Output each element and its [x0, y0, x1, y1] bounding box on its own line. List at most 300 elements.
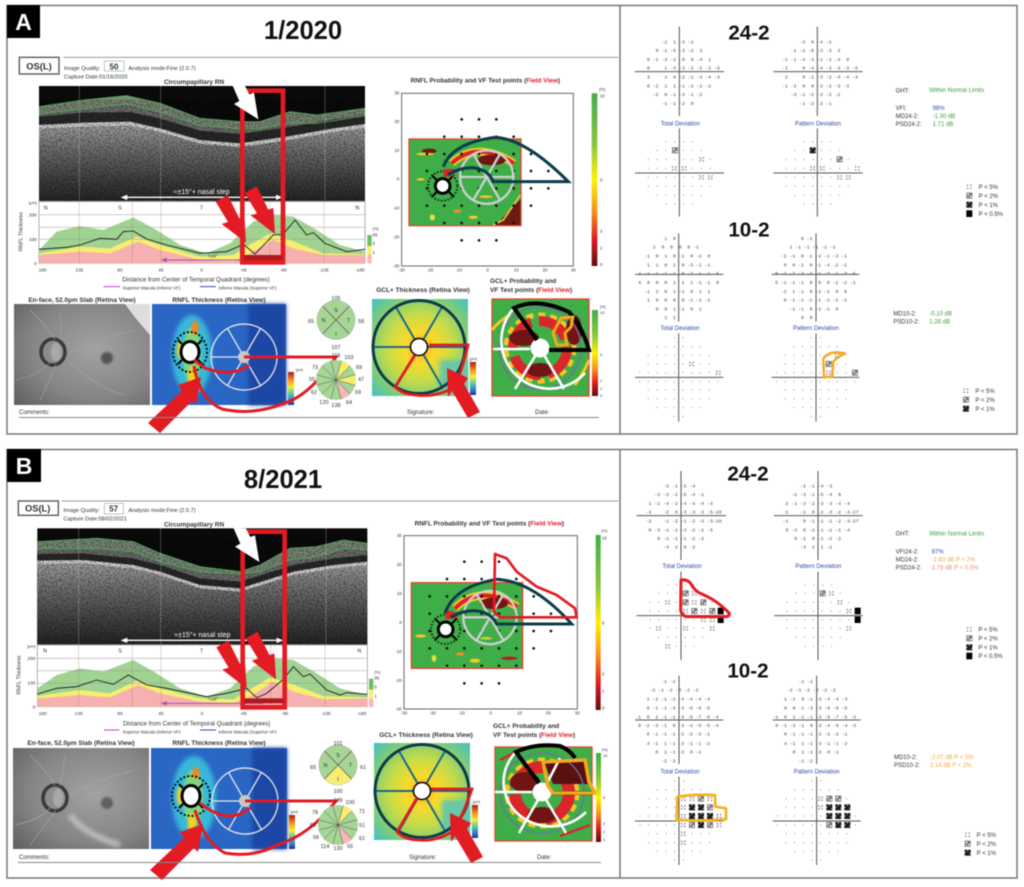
deviation captions	[662, 564, 841, 570]
RNFL thickness profile chart	[17, 643, 380, 734]
global indices: Within Normal Limits	[929, 88, 984, 94]
probability colour scale: 0	[602, 705, 605, 710]
orange defect outline	[543, 760, 595, 793]
plot axes: 0	[399, 620, 402, 625]
scan metadata: Analysis mode:Fine (2.0.7)	[128, 508, 196, 514]
clock sector thickness pie: 78	[312, 810, 318, 816]
OS eye tag	[18, 501, 58, 515]
A 24-2 visual field	[635, 21, 1004, 218]
total deviation values: 6 0 0 0 1 1 1 -1 -1 0	[633, 280, 719, 286]
RNFL thickness profile chart: 180	[39, 268, 47, 273]
global indices: PSD24-2:	[896, 122, 922, 128]
RNFL thickness profile chart: T	[200, 205, 204, 211]
global indices: MD10-2:	[893, 311, 917, 317]
probability legend: P < 2%	[979, 194, 999, 200]
map title: RNFL Probability and VF Test points (Field View)	[415, 521, 564, 528]
quadrant thickness oval: I	[337, 777, 339, 783]
pattern deviation values: -2 -3 -1 -5 -4 0	[780, 492, 841, 498]
plot axes: -30	[399, 267, 405, 272]
total deviation values	[643, 483, 722, 551]
quadrant thickness oval: 107	[331, 345, 341, 351]
global indices: MD10-2:	[894, 755, 917, 761]
wheel centre	[238, 351, 250, 363]
probability colour scale: 5	[600, 352, 603, 357]
total deviation values: 0 -1 -1 -3 -3 -6 -6 -5	[632, 705, 710, 711]
test point dots	[430, 562, 568, 683]
clock sector thickness pie: 73	[312, 365, 318, 371]
clock sector thickness pie: 55	[309, 377, 315, 383]
probability legend: P < 5%	[977, 833, 997, 839]
probability colour scale: 2	[603, 821, 606, 826]
scan metadata	[64, 61, 196, 81]
label A: A	[15, 9, 32, 35]
B 24-2 visual field	[637, 463, 1003, 660]
plot axes: 0	[486, 267, 489, 272]
RNFL thickness profile chart: N	[43, 649, 47, 655]
quadrant thickness oval: 65	[308, 319, 314, 325]
navy sector outline	[443, 137, 568, 182]
orange defect outline	[677, 795, 726, 821]
RNFL thickness profile chart: 1	[374, 694, 377, 699]
global indices: -2.63 dB P < 2%	[932, 558, 976, 564]
global indices: -2.07 dB P < 5%	[930, 755, 974, 761]
plot axes: -20	[427, 267, 434, 272]
RNFL thickness profile chart: Distance from Center of Temporal Quadrant (degrees)	[123, 720, 270, 727]
red arrow to disc	[150, 824, 203, 880]
report footer fields: Signature:	[409, 855, 437, 861]
GCL+ probability map: GCL+ Probability and	[490, 278, 556, 285]
B 10-2 visual field	[632, 659, 997, 865]
test point dots	[427, 119, 566, 240]
deviation captions: Total Deviation	[660, 770, 700, 776]
RNFL thickness profile chart: 200	[28, 656, 36, 661]
pattern deviation values: 0 -1 0 -1 -2 -2	[780, 536, 841, 542]
RNFL thickness profile chart: 100	[29, 237, 37, 242]
date title 1/2020: 1/2020	[264, 17, 342, 45]
RNFL thickness profile chart: 5	[373, 241, 376, 246]
clock sector thickness pie	[310, 798, 365, 852]
probability colour scale	[592, 87, 605, 267]
quadrant thickness oval: 101	[333, 741, 343, 747]
RNFL thickness profile chart	[18, 200, 378, 290]
total deviation values: 1 -2 -4 -2 -4 -4 -4 -4	[643, 501, 713, 507]
optic disc marker	[428, 169, 457, 201]
scan metadata	[63, 503, 196, 522]
deviation axes	[635, 676, 861, 865]
total deviation values: -2 1 -3 -1	[641, 39, 694, 45]
white sector wheel	[212, 768, 278, 834]
probability colour scale: 0	[600, 393, 603, 398]
pattern deviation values: 0 -1 -1 -1 -2 -2 -2 -1	[770, 732, 848, 738]
probability colour scale: 1	[600, 246, 603, 251]
clock sector thickness pie: 138	[331, 403, 341, 409]
quadrant thickness oval: S	[336, 753, 340, 759]
deviation axes	[635, 27, 863, 217]
RNFL thickness profile chart: 95	[374, 675, 380, 680]
probability legend	[963, 389, 995, 413]
plot axes	[393, 91, 576, 272]
plot axes: -10	[395, 649, 402, 654]
probability legend: P < 2%	[978, 636, 998, 642]
colour scale	[289, 810, 298, 849]
deviation captions: Total Deviation	[662, 564, 702, 570]
RNFL thickness profile chart: -90	[280, 268, 287, 273]
global indices	[896, 88, 984, 128]
pattern deviation values	[770, 679, 856, 764]
clock sector thickness pie: 61	[359, 836, 365, 842]
probability colour scale: 2	[600, 228, 603, 233]
colour scale: [µm]	[291, 810, 298, 814]
global indices: 1.71 dB	[933, 122, 953, 128]
nasal step span arrow: ≈±15°+ nasal step	[174, 188, 230, 196]
RNFL thickness profile chart: N	[357, 649, 361, 655]
report footer fields: Date:	[535, 410, 550, 416]
RNFL thickness profile chart: 0	[34, 261, 37, 266]
pattern deviation values: -3 -1 -2 -3 -2 -2	[779, 92, 841, 98]
probability dots	[640, 338, 855, 416]
total deviation values: 0 -2 1 1 -1 -2 -2 -2	[641, 83, 711, 89]
A 10-2 visual field	[633, 218, 995, 422]
nasal step span arrow	[121, 188, 283, 200]
clock sector thickness pie: 71	[359, 809, 365, 815]
total deviation values: 0 -1 -1 -1 -2 -2 -2 -1	[632, 732, 710, 738]
red arrows on RNFL profile	[216, 186, 275, 243]
plot axes: 20	[395, 119, 400, 124]
plot axes: 0	[489, 710, 492, 715]
probability colour scale: 5	[602, 620, 605, 625]
disc marker	[172, 776, 210, 816]
clock sector thickness pie: 130	[333, 846, 343, 852]
probability legend	[965, 833, 997, 857]
total deviation values: -1 -2	[632, 679, 676, 685]
clock sector thickness pie: 64	[346, 400, 352, 406]
pattern deviation values: -3 0 -4 -2	[779, 39, 832, 45]
RNFL thickness profile chart: 95	[373, 232, 378, 237]
pattern deviation values: 5 -1 -1 -1 0 0 0 -2 -2 -1	[769, 280, 856, 286]
GCL+ thickness map	[372, 287, 477, 396]
RNFL thickness profile chart: 5	[374, 685, 377, 690]
pattern deviation values: 0 1 -1 -3 0 -1	[770, 749, 839, 755]
red defect outline	[681, 580, 729, 617]
RNFL probability and VF test points map	[393, 78, 605, 272]
RNFL thickness profile chart: 45	[158, 711, 164, 716]
red highlight rectangle	[243, 532, 285, 707]
GCL+ probability map: VF Test points (Field View)	[490, 287, 572, 294]
RNFL thickness profile chart: [%]	[373, 226, 378, 231]
plot axes: -10	[459, 710, 465, 715]
RNFL thickness profile chart: N	[355, 205, 359, 211]
probability colour scale: 2	[602, 671, 605, 676]
clock sector thickness pie: 47	[358, 377, 364, 383]
total deviation values	[632, 679, 719, 764]
report footer fields: Date:	[537, 855, 552, 861]
probability symbols	[672, 147, 859, 179]
en-face slab image: En-face, 52.0µm Slab (Retina View)	[28, 297, 136, 304]
deviation captions: Pattern Deviation	[794, 770, 840, 776]
plot axes: 30	[397, 533, 402, 538]
RNFL thickness profile chart: 1	[373, 250, 376, 255]
disc marker	[173, 332, 207, 372]
scan metadata: Image Quality:	[63, 508, 100, 514]
pattern deviation values	[780, 483, 859, 551]
total deviation values: 0 1 -1 -3 0 -2	[632, 749, 702, 755]
RNFL thickness profile chart: 135	[75, 711, 83, 716]
nasal step span arrow: ≈±15°+ nasal step	[174, 631, 230, 639]
quadrant thickness oval	[308, 296, 364, 351]
clock sector thickness pie: 62	[311, 390, 317, 396]
GCL+ thickness map: GCL+ Thickness (Retina View)	[376, 287, 470, 294]
probability colour scale: 5	[600, 177, 603, 182]
pattern deviation values: -1 -2	[770, 758, 813, 764]
red defect outline	[494, 554, 577, 617]
red GCL outline	[397, 789, 472, 840]
pattern deviation values: -1 -1 0 -2 -3 -2 -4-27	[780, 509, 859, 515]
RNFL thickness profile chart: ≈±8°	[208, 253, 218, 259]
probability colour scale	[596, 528, 607, 710]
plot axes: 30	[575, 710, 580, 715]
probability colour scale: 5	[603, 795, 606, 800]
report footer fields	[18, 855, 601, 862]
RNFL thickness profile chart: S	[118, 205, 122, 211]
optic disc marker	[431, 609, 460, 644]
pattern deviation values: -2 -1 -2 -3 -2 -2	[770, 688, 836, 694]
centre hole	[532, 782, 552, 802]
en-face slab image	[14, 297, 150, 405]
nasal step span arrow	[121, 631, 283, 643]
report header and circumpapillary scan	[17, 501, 618, 734]
RNFL thickness profile chart: -180	[355, 268, 365, 273]
date title 8/2021: 8/2021	[244, 466, 322, 494]
clock sector thickness pie: 56	[310, 823, 316, 829]
deviation captions: Pattern Deviation	[793, 326, 839, 332]
deviation captions: Pattern Deviation	[795, 564, 841, 570]
pattern deviation values: 2 -1 -3 -2 -3 -3 -4 -4	[780, 501, 850, 507]
clock sector thickness pie: 69	[356, 365, 362, 371]
probability heat map	[409, 139, 521, 226]
probability colour scale: 0	[603, 837, 606, 842]
pattern deviation values: -1 0 -1 -1 -1 -2 -3-27	[780, 518, 859, 524]
RNFL thickness map	[151, 740, 298, 849]
RNFL thickness profile chart: Inferior Macula (Superior VF)	[219, 729, 277, 734]
red arrow on GCL map	[447, 368, 480, 418]
gray sector wheel	[463, 591, 517, 644]
probability legend: P < 5%	[978, 628, 998, 634]
pattern deviation values: 2 0 -1 -3 -2 -4 -4 -3	[779, 75, 858, 81]
pattern deviation values: 1 -1 -1 -1 -1 -2	[769, 245, 836, 251]
plot axes: -30	[395, 707, 402, 712]
red arrows on RNFL profile	[216, 632, 276, 688]
pattern deviation values	[769, 236, 856, 321]
GCL+ thickness map: GCL+ Thickness (Retina View)	[379, 732, 473, 739]
deviation captions: Pattern Deviation	[795, 121, 841, 127]
RNFL thickness profile chart: 200	[29, 213, 37, 218]
probability colour scale: 1	[602, 688, 605, 693]
pattern deviation values: 0 -3 0 -1 -1 -1 -1 -4	[780, 527, 850, 533]
scan title: Circumpapillary RN	[164, 521, 224, 528]
RNFL thickness profile chart: S	[118, 649, 122, 655]
scan metadata: Capture Date:01/16/2020	[64, 75, 128, 81]
pattern deviation values: -1 -2 0 0 -2 -2 -3 -3	[779, 83, 849, 89]
pattern deviation values: 0 -1 -1 -1 -1 -2 -2 -2	[769, 298, 847, 304]
RNFL thickness profile chart: [µm]	[29, 200, 37, 205]
global indices: 2.14 dB P < 2%	[930, 763, 972, 769]
RNFL thickness profile chart: N	[44, 205, 48, 211]
quadrant thickness oval	[310, 741, 366, 795]
centre hole	[530, 338, 550, 358]
centre hole	[414, 782, 430, 800]
deviation captions: Total Deviation	[661, 121, 700, 127]
RNFL thickness profile chart: 0	[201, 711, 204, 716]
RNFL thickness profile chart: RNFL Thickness	[17, 655, 23, 695]
total deviation values: 1 -1 -1 -1 -1 0 -2 -1 -2 -5	[633, 271, 719, 277]
RNFL thickness profile chart: 100	[28, 680, 36, 685]
RNFL thickness profile chart: -135	[321, 711, 331, 716]
total deviation values: 0 -1 -3 -2 0 0 -4 1	[641, 57, 711, 63]
probability colour scale: [%]	[600, 305, 606, 309]
RNFL thickness map: RNFL Thickness (Retina View)	[172, 297, 266, 304]
clock sector thickness pie: 116	[332, 353, 340, 359]
total deviation values: -4 2 0 -2	[643, 545, 695, 551]
probability colour scale: 10	[600, 94, 605, 99]
global indices: MD24-2:	[896, 558, 919, 564]
white arrow	[233, 528, 259, 562]
plot axes: 10	[514, 267, 519, 272]
RNFL thickness profile chart: -45	[240, 711, 247, 716]
RNFL thickness profile chart: Superior Macula (Inferior VF)	[123, 285, 181, 290]
white arrow	[232, 85, 258, 119]
clock sector thickness pie: 100	[345, 800, 355, 806]
pattern deviation values: 0 0 -1 0 -1 -4 -2 -2	[769, 262, 847, 268]
clock sector thickness pie: 109	[333, 798, 343, 804]
probability legend: P < 5%	[979, 185, 999, 191]
plot axes: 10	[397, 591, 402, 596]
OCT b-scan image	[37, 528, 367, 644]
global indices: Within Normal Limits	[929, 532, 984, 538]
total deviation values: 1 1	[633, 315, 676, 321]
GCL+ thickness map	[374, 732, 480, 840]
probability legend: P < 2%	[975, 398, 995, 404]
scan metadata: Analysis mode:Fine (2.0.7)	[128, 66, 196, 72]
black sector outline	[514, 303, 589, 350]
GCL+ probability map: GCL+ Probability and	[493, 723, 559, 730]
total deviation values	[633, 236, 719, 321]
GCL+ probability map: VF Test points (Field View)	[493, 732, 575, 739]
total deviation values: 1 0	[633, 236, 676, 242]
total deviation values: -2 -3	[632, 758, 676, 764]
clock sector thickness pie: 59	[355, 390, 361, 396]
deviation captions	[660, 770, 840, 776]
red arrow to disc	[148, 377, 201, 433]
scan title: Circumpapillary RN	[164, 79, 224, 86]
global indices: PSD10-2:	[894, 763, 920, 769]
colour scale: [µm]	[473, 800, 480, 804]
pattern deviation values: 0 0 -1 -3 -3 -6 -6 -5	[770, 705, 848, 711]
white sector wheel	[493, 308, 585, 389]
plot axes: -20	[395, 678, 402, 683]
probability legend: P < 0.5%	[979, 212, 1004, 218]
total deviation values: 1 -2 -1 -2 -4 -4 -4 -4	[632, 697, 710, 703]
OS eye tag: OS(L)	[25, 503, 50, 513]
probability colour scale: 2	[600, 378, 603, 383]
probability colour scale: 1	[600, 386, 603, 391]
probability symbols	[681, 796, 850, 845]
total deviation values: -3 -3 -2 -5 -4 -1	[643, 492, 704, 498]
RNFL thickness profile chart: Distance from Center of Temporal Quadrant (degrees)	[122, 276, 270, 283]
RNFL thickness profile chart: -90	[282, 711, 289, 716]
pattern deviation values: 0 0	[769, 315, 813, 321]
total deviation values: -2 -1 -2 -1 -2 -3 -3-28	[643, 518, 722, 524]
scan metadata: Image Quality:	[64, 66, 101, 72]
white sector wheel	[495, 752, 586, 833]
label A	[7, 5, 40, 38]
clock sector thickness pie	[309, 353, 364, 409]
quadrant thickness oval: N	[324, 763, 328, 769]
quadrant thickness oval: I	[335, 332, 337, 338]
RNFL probability and VF test points map	[395, 521, 607, 715]
report footer fields: Signature:	[407, 410, 435, 416]
en-face slab image: En-face, 52.0µm Slab (Retina View)	[27, 740, 135, 747]
RNFL thickness profile chart: Superior Macula (Inferior VF)	[123, 729, 181, 734]
plot axes: 30	[571, 267, 576, 272]
total deviation values: 0 1 -3 -3 -2 -2 -2 -5	[641, 65, 720, 71]
heading 24-2: 24-2	[727, 463, 769, 486]
scan metadata: 57	[109, 504, 119, 513]
plot axes: 0	[397, 177, 400, 182]
probability legend: P < 5%	[975, 389, 995, 395]
RNFL thickness map	[152, 297, 303, 405]
global indices: -0.10 dB	[929, 311, 952, 317]
clock sector thickness pie: 120	[319, 400, 329, 406]
pattern deviation values: -1 -2 -2 -1	[779, 101, 832, 107]
clock sector thickness pie: 55	[347, 844, 353, 850]
clock sector thickness pie: 51	[359, 823, 365, 829]
OCT b-scan image	[39, 86, 365, 201]
total deviation values: 1 0 0 0 0 -1 -1 -1	[633, 298, 711, 304]
pattern deviation values: -1 -1 0 -2 -1 0	[769, 306, 839, 312]
probability legend: P < 1%	[979, 203, 999, 209]
RNFL thickness profile chart: T	[200, 649, 204, 655]
plot axes: -20	[430, 710, 436, 715]
probability legend: P < 1%	[975, 407, 995, 413]
total deviation values: 0 -1 -1 -1 -2 -2	[643, 536, 704, 542]
total deviation values: -2 0 -1 -3 -1 -2	[641, 92, 703, 98]
pattern deviation values: 0 -1	[769, 236, 813, 242]
plot axes	[395, 533, 580, 715]
total deviation values: -1 2 0 1 -1 0 1 1	[633, 289, 711, 295]
navy sector outline	[445, 579, 572, 624]
colour scale: [µm]	[470, 357, 477, 361]
probability symbols	[656, 590, 861, 648]
quadrant thickness oval: 58	[358, 319, 364, 325]
pattern deviation values: -1 -2 -6 -3 -3 2	[779, 48, 841, 54]
plot axes: -30	[401, 710, 408, 715]
heading 10-2: 10-2	[728, 218, 770, 241]
probability dots	[650, 585, 858, 646]
RNFL thickness profile chart: Inferior Macula (Superior VF)	[219, 285, 277, 290]
label B: B	[16, 453, 32, 479]
red arrow on GCL map	[450, 813, 483, 863]
pattern deviation values: -2 1 -1 0 -2 -1 0 0	[769, 289, 847, 295]
scan metadata: 50	[110, 62, 119, 71]
RNFL thickness profile chart: 45	[158, 268, 164, 273]
red highlight rectangle	[242, 91, 283, 262]
pattern deviation values: -2 -1 -4 -3	[780, 483, 832, 489]
plot axes: 30	[395, 91, 400, 96]
total deviation values: -2 -2 0 -3 -3 -3 -5-28	[643, 509, 722, 515]
probability dots	[648, 142, 857, 204]
RNFL thickness profile chart: -45	[240, 268, 247, 273]
dark sector wheel	[375, 744, 469, 838]
